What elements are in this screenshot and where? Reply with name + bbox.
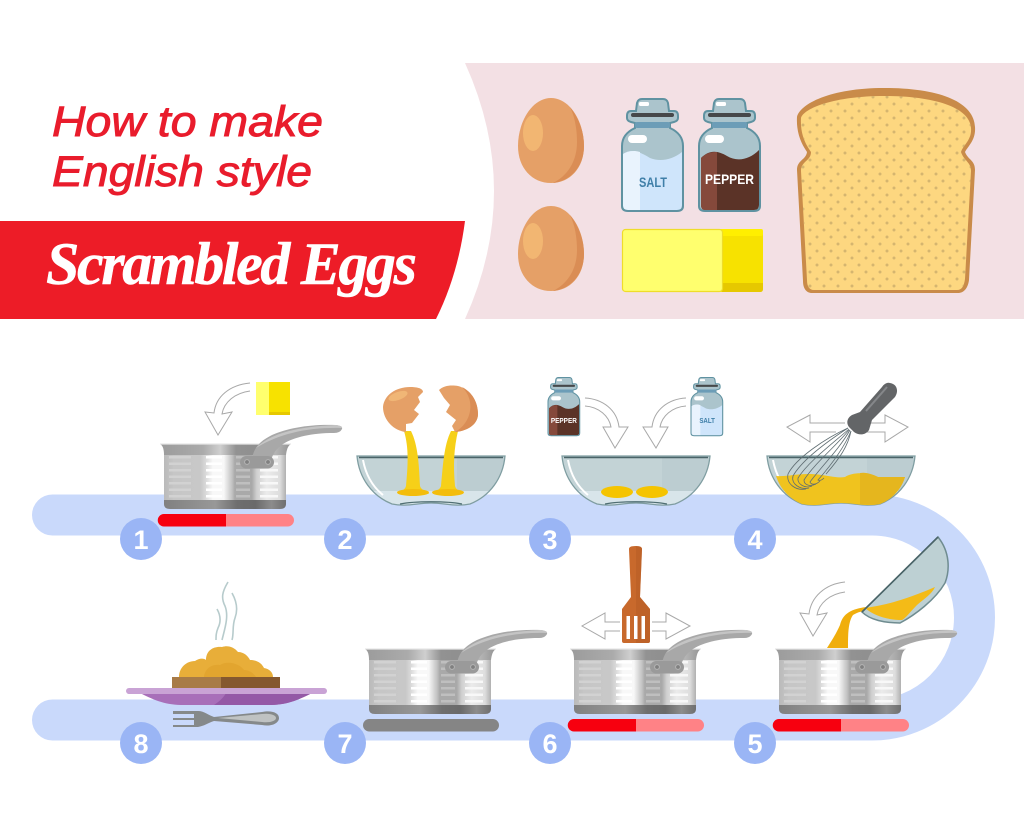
arrow: stir left <box>582 613 620 639</box>
burner half on <box>568 719 704 732</box>
header background: ingredients panel <box>465 63 1024 319</box>
arrow: butter into pot <box>205 383 250 435</box>
whisk <box>788 383 897 489</box>
pot <box>365 630 547 714</box>
egg stream <box>827 607 868 648</box>
pot <box>775 630 957 714</box>
burner half on <box>773 719 909 732</box>
tilted bowl <box>862 537 948 623</box>
red banner with title: Scrambled Eggs <box>46 231 417 297</box>
small salt jar <box>691 378 723 436</box>
process path band <box>52 515 975 720</box>
arrow: back and forth left <box>787 415 845 442</box>
arrow: salt into bowl <box>643 398 686 448</box>
ingredient: butter <box>622 229 763 292</box>
number badge 6: 6 <box>542 729 558 759</box>
red banner with title <box>0 221 465 319</box>
arrow: pepper into bowl <box>585 398 628 448</box>
toast <box>172 677 280 688</box>
pot with heat on <box>160 425 342 509</box>
ingredient: pepper jar <box>699 99 760 211</box>
number badge 2: 2 <box>337 525 353 555</box>
number badge 6 <box>529 722 571 764</box>
ingredient: bread slice <box>797 88 975 293</box>
plate <box>126 688 327 705</box>
arrow: stir right <box>652 613 690 639</box>
number badge 5 <box>734 722 776 764</box>
burner half on <box>158 514 294 526</box>
step 6: stir with spatula <box>568 546 752 732</box>
small salt jar: SALT <box>699 416 715 425</box>
number badge 3 <box>529 518 571 560</box>
small pepper jar: PEPPER <box>551 416 578 425</box>
cracked shells <box>383 385 478 432</box>
bowl <box>767 456 917 510</box>
ingredient: pepper jar: PEPPER <box>705 171 754 187</box>
number badge 4 <box>734 518 776 560</box>
egg yolk streams <box>397 431 464 496</box>
step 2: crack eggs into bowl <box>357 385 507 510</box>
number badge 7 <box>324 722 366 764</box>
fork <box>173 711 279 727</box>
step 5: pour eggs into pot <box>773 537 957 732</box>
step 8: serve on toast <box>126 582 327 727</box>
title: How to make English style: How to make <box>52 98 323 146</box>
beaten egg <box>776 473 905 505</box>
step 4: whisk eggs <box>767 383 917 510</box>
small pepper jar <box>548 378 580 436</box>
spatula <box>622 546 650 643</box>
number badge 8: 8 <box>133 729 149 759</box>
step 3: season with salt and pepper <box>548 378 723 510</box>
ingredient: egg top <box>518 98 584 183</box>
number badge 4: 4 <box>747 525 763 555</box>
ingredient: egg bottom <box>518 206 584 291</box>
butter cube <box>256 382 290 415</box>
yolks <box>601 486 668 498</box>
number badge 8 <box>120 722 162 764</box>
number badge 3: 3 <box>542 525 558 555</box>
number badge 1: 1 <box>133 525 149 555</box>
ingredient: salt jar <box>622 99 683 211</box>
pot <box>570 630 752 714</box>
step 7: pot off heat <box>363 630 547 732</box>
number badge 7: 7 <box>337 729 353 759</box>
arrow: back and forth right <box>858 415 908 442</box>
burner off <box>363 719 499 732</box>
number badge 1 <box>120 518 162 560</box>
step 1: melt butter in pot <box>158 382 342 526</box>
number badge 5: 5 <box>747 729 763 759</box>
arrow: pour direction <box>800 582 845 636</box>
title: How to make English style <box>52 98 323 196</box>
steam <box>216 582 237 640</box>
title: How to make English style: English style <box>52 148 312 196</box>
ingredient: salt jar: SALT <box>639 174 667 190</box>
scrambled egg <box>179 646 273 677</box>
bowl <box>357 456 507 510</box>
number badge 2 <box>324 518 366 560</box>
bowl <box>562 456 712 510</box>
